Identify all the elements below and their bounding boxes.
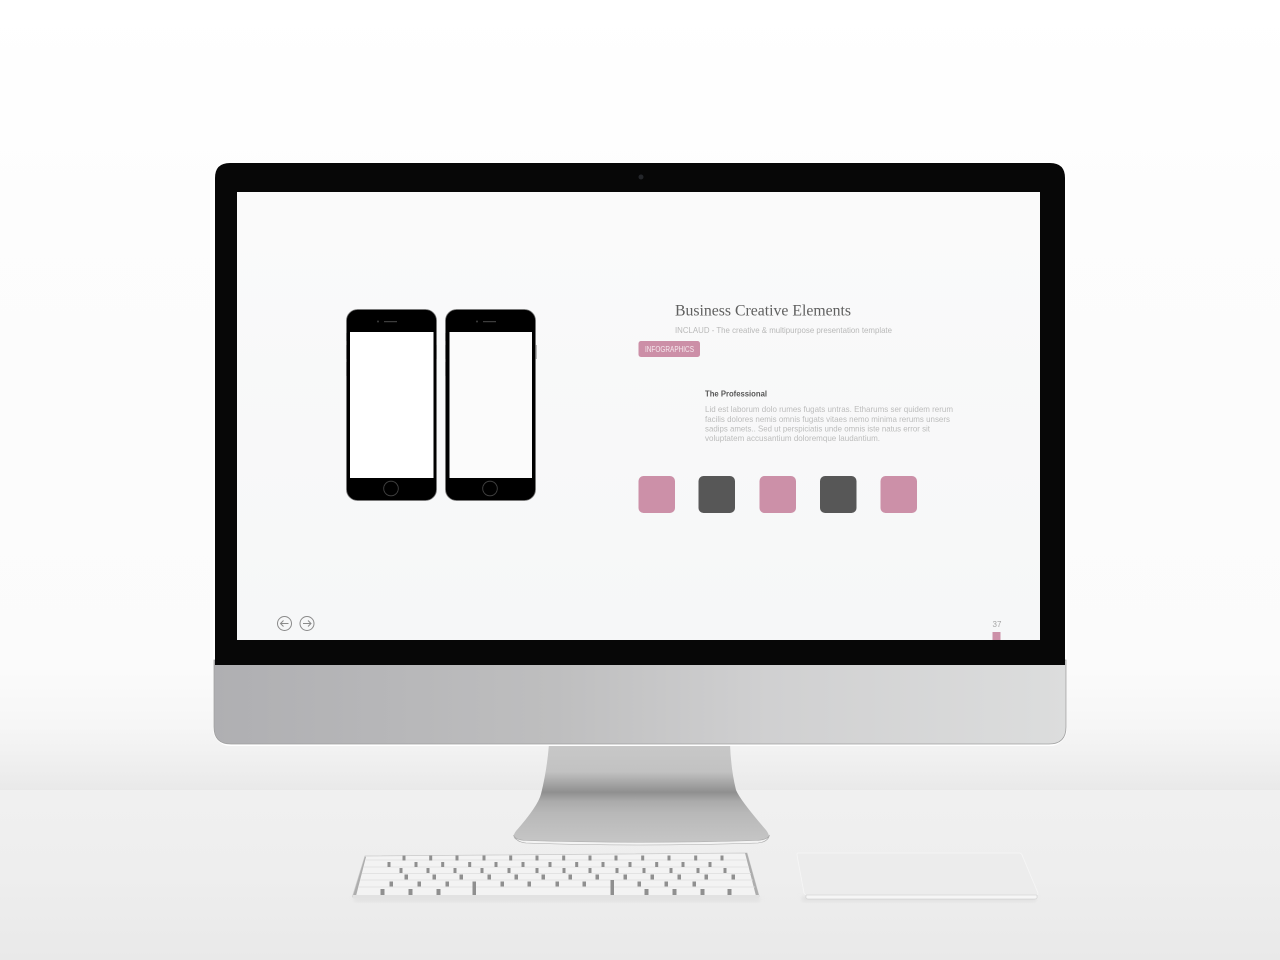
swatch 4: [820, 476, 856, 513]
webcam: [638, 174, 644, 180]
badge shape: [638, 341, 700, 357]
phone mockups: [346, 310, 536, 500]
keyboard shadow: [354, 898, 760, 901]
phone right: [445, 310, 536, 500]
phone left: [346, 310, 437, 500]
subtitle: INCLAUD - The creative & multipurpose presentation template: [675, 325, 892, 335]
keyboard body: [353, 853, 759, 898]
keyboard: [353, 853, 760, 901]
icon: next arrow: [300, 616, 314, 630]
side buttons: [445, 333, 536, 376]
swatch 3: [760, 476, 796, 513]
camera: [377, 320, 379, 322]
text block: The Professional: [705, 390, 953, 443]
body copy: voluptatem accusantium doloremque laudantium.: [705, 433, 880, 443]
colour swatches: [638, 476, 917, 513]
camera: [476, 320, 478, 322]
icon: previous arrow: [278, 616, 292, 630]
home button: [483, 481, 497, 496]
trackpad front edge: [806, 895, 1037, 899]
badge label: INFOGRAPHICS: [645, 345, 694, 354]
speaker: [384, 321, 397, 322]
swatch 2: [698, 476, 735, 513]
body: [346, 310, 436, 500]
key row lines: [358, 860, 755, 887]
monitor: [213, 161, 1067, 746]
trackpad shadow: [802, 897, 1036, 901]
stand body: [514, 744, 769, 842]
monitor stand: [514, 744, 770, 845]
speaker: [483, 321, 496, 322]
chin: [214, 660, 1066, 744]
trackpad: [797, 853, 1038, 901]
stand foot rim: [514, 835, 770, 845]
display: [450, 332, 532, 478]
body copy: Lid est laborum dolo rumes fugats untras. Etharums ser quidem rerum: [705, 404, 953, 414]
body: [446, 310, 536, 500]
key gaps: [380, 856, 735, 895]
body copy: facilis dolores nemis omnis fugats vitaes nemo minima rerums unsers: [705, 414, 950, 424]
heading: The Professional: [705, 390, 767, 398]
side buttons: [346, 333, 437, 376]
title: Business Creative Elements: [675, 302, 851, 320]
badge: [638, 341, 700, 357]
trackpad surface: [797, 853, 1038, 895]
display: [350, 332, 434, 478]
bezel: [215, 163, 1065, 665]
background: desk: [0, 790, 1280, 960]
keyboard side edges: [353, 853, 759, 896]
page marker: [992, 632, 1000, 640]
keyboard front edge: [353, 895, 759, 898]
body copy: [705, 404, 953, 443]
body copy: sadips amets.. Sed ut perspiciatis unde omnis iste natus error sit: [705, 424, 931, 434]
home button: [384, 481, 398, 496]
slide background: [237, 192, 1040, 640]
swatch 1: [638, 476, 675, 513]
page number: 37: [993, 620, 1002, 629]
halo outline: [213, 161, 1067, 746]
screen: [237, 192, 1040, 640]
swatch 5: [880, 476, 917, 513]
